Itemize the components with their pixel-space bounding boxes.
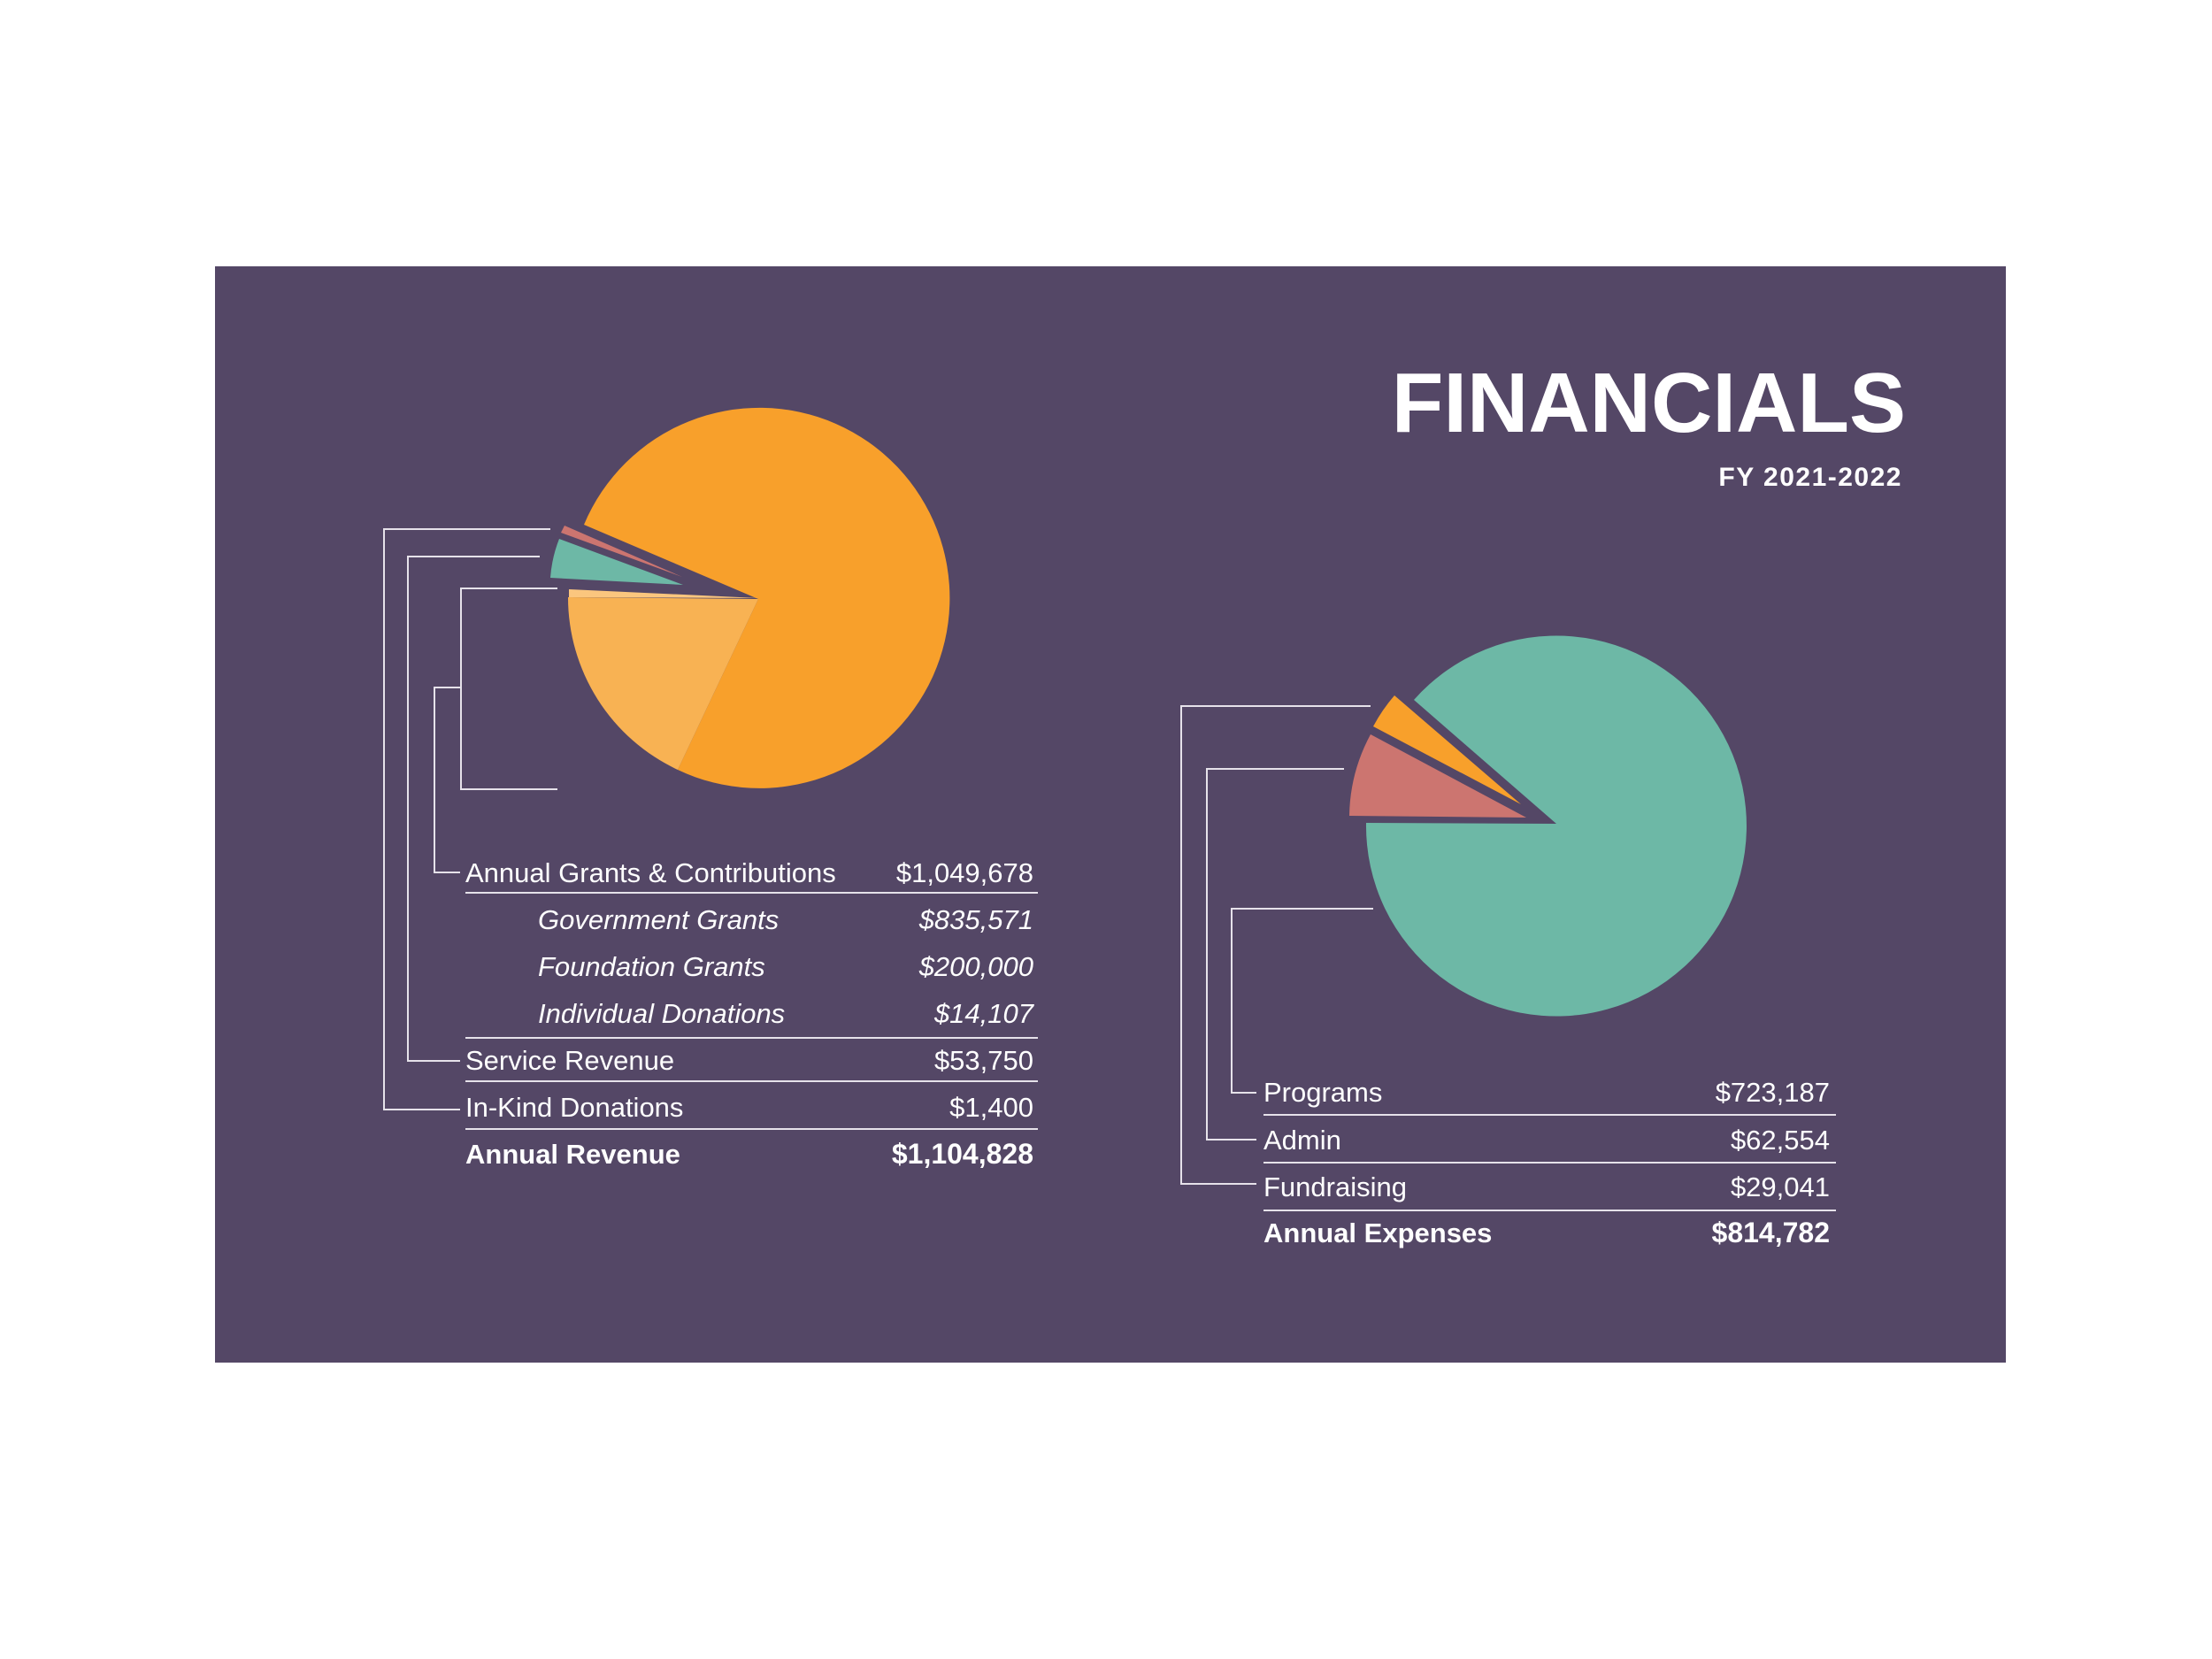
table: expenses	[1263, 1077, 1836, 1248]
table: revenue: Government Grants	[538, 904, 779, 935]
table: expenses: Fundraising	[1263, 1171, 1407, 1202]
table: revenue: $53,750	[934, 1045, 1033, 1076]
table: expenses: Programs	[1263, 1077, 1382, 1108]
table: revenue: $1,104,828	[892, 1138, 1033, 1170]
table: expenses: Annual Expenses	[1263, 1217, 1492, 1248]
table: expenses: $723,187	[1716, 1077, 1830, 1108]
table: revenue: $200,000	[918, 951, 1033, 982]
table: revenue: Annual Revenue	[465, 1139, 680, 1170]
connector lines: expenses	[1181, 706, 1373, 1184]
table: expenses: $814,782	[1712, 1217, 1830, 1248]
table: revenue: Individual Donations	[538, 998, 785, 1029]
panel: background	[215, 266, 2006, 1363]
table: revenue: $1,049,678	[896, 857, 1033, 888]
table: revenue: Annual Grants & Contributions	[465, 857, 836, 888]
table: revenue: $835,571	[918, 904, 1033, 935]
title: FINANCIALS	[1392, 356, 1906, 450]
subtitle: FY 2021-2022	[1718, 463, 1902, 492]
pie chart: expenses	[1349, 636, 1747, 1017]
table: revenue	[465, 857, 1038, 1170]
table: revenue: $1,400	[949, 1092, 1033, 1123]
table: revenue: Service Revenue	[465, 1045, 674, 1076]
pie chart: revenue	[550, 408, 949, 788]
connector lines: revenue	[384, 529, 557, 1110]
table: revenue: $14,107	[933, 998, 1035, 1029]
table: expenses: $29,041	[1731, 1171, 1830, 1202]
table: revenue: In-Kind Donations	[465, 1092, 683, 1123]
table: revenue: Foundation Grants	[538, 951, 765, 982]
table: expenses: $62,554	[1731, 1125, 1830, 1156]
table: expenses: Admin	[1263, 1125, 1341, 1156]
